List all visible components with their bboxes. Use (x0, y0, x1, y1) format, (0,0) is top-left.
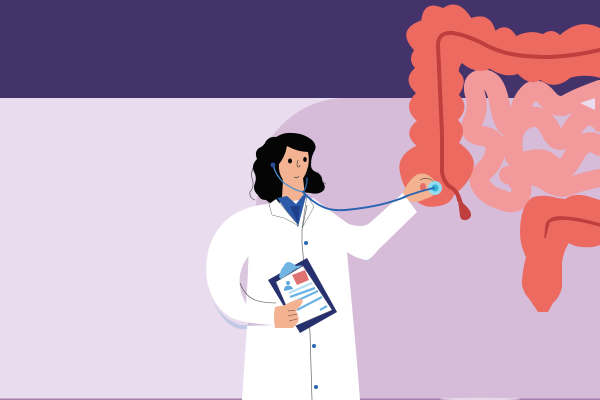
left lapel (269, 199, 299, 226)
doctor (206, 133, 442, 400)
large intestine: descending colon and rectum (520, 195, 600, 312)
stray hair strands (250, 162, 326, 200)
arm crease (240, 283, 276, 303)
small intestine (471, 79, 600, 202)
eyes (288, 157, 307, 164)
stethoscope tubing (273, 165, 434, 210)
clipboard (268, 258, 337, 333)
patient photo placeholder (292, 270, 309, 285)
clipboard board (268, 258, 337, 333)
clipboard paper (276, 266, 332, 326)
lab coat (206, 193, 417, 400)
examining hand with stethoscope chest piece (403, 174, 442, 202)
gap between arm and body (240, 256, 248, 304)
background: dark purple top band (0, 0, 600, 98)
clipboard clip (279, 262, 302, 279)
highlight between intestine loops (580, 98, 595, 110)
sleeve shadow (212, 250, 372, 330)
face (279, 146, 309, 184)
nose and mouth (294, 160, 300, 178)
patient icon (284, 281, 293, 291)
colon inner fold line and appendix (438, 33, 600, 220)
background: darker lilac rounded panel (248, 98, 600, 400)
holding hand (274, 299, 303, 328)
coat centre line (302, 205, 312, 400)
neck (282, 178, 305, 206)
shirt collar shadow (290, 206, 300, 224)
bottom edge strip (0, 398, 600, 400)
large intestine: ascending and transverse colon with cecum (400, 5, 600, 206)
right lapel (302, 195, 314, 228)
coat buttons (304, 241, 318, 389)
hair (253, 133, 325, 204)
stethoscope earpiece (271, 163, 275, 167)
shirt (277, 194, 306, 227)
form lines (289, 283, 327, 310)
